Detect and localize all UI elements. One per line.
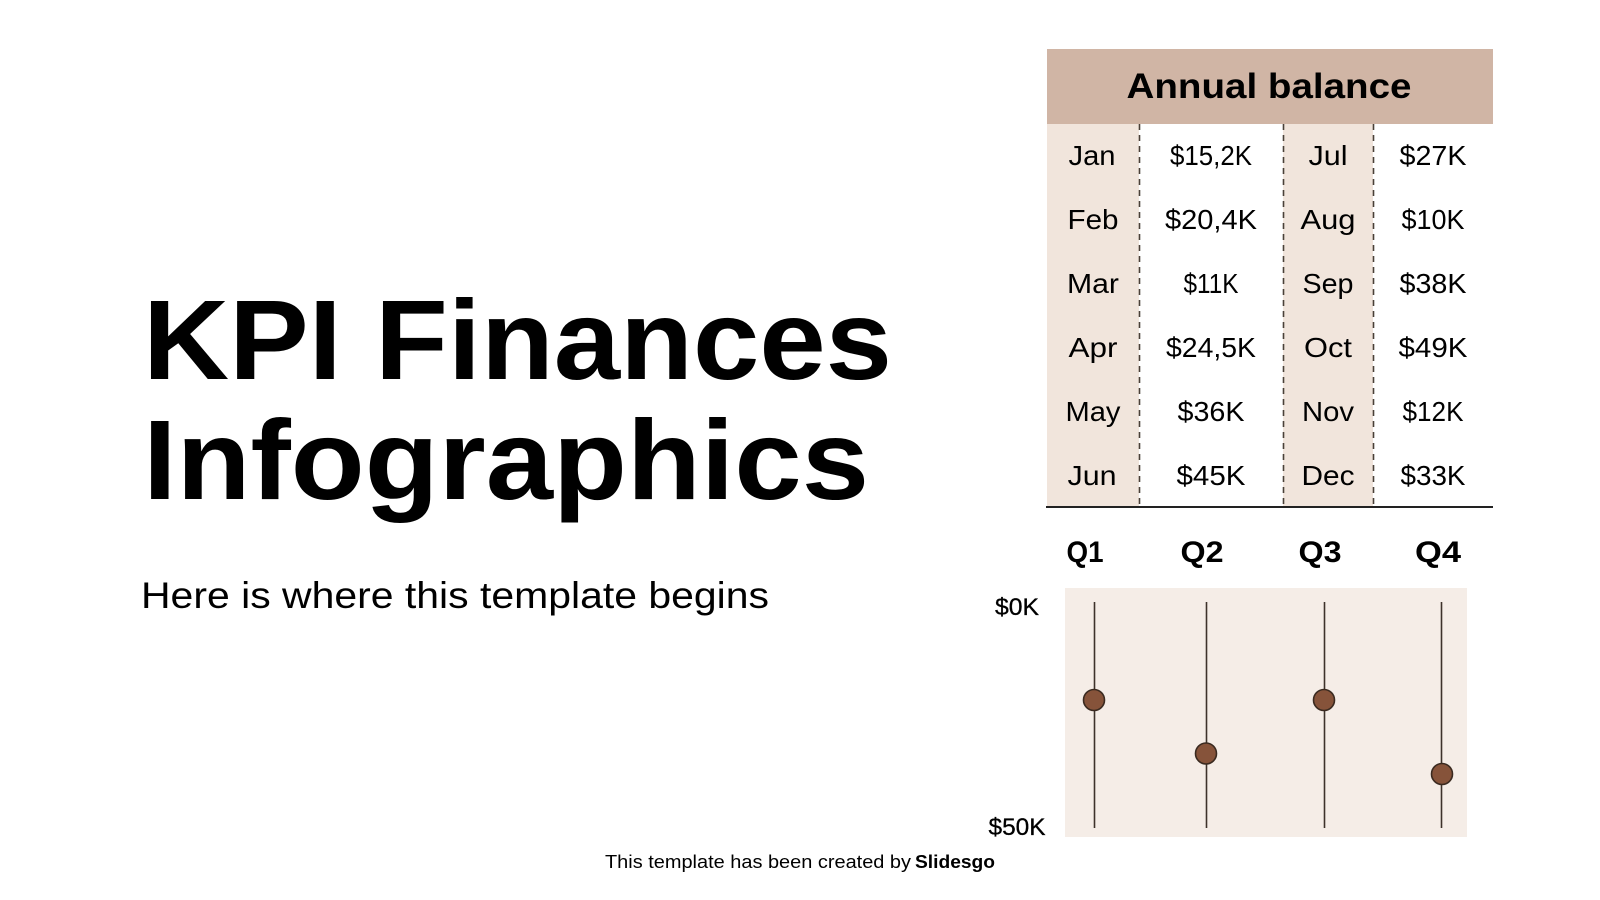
- second half months: Sep: [1302, 268, 1354, 299]
- marker: Q4: [1432, 602, 1452, 828]
- table bottom rule: [1046, 506, 1493, 508]
- second half values: $27K: [1400, 140, 1467, 171]
- first half values: $36K: [1178, 396, 1245, 427]
- first half months: Jan: [1068, 140, 1116, 171]
- table header: [1047, 49, 1493, 124]
- footer credit: This template has been created by: [605, 852, 911, 872]
- first half months: Mar: [1067, 268, 1119, 299]
- quarter labels: Q4: [1415, 536, 1461, 569]
- first half months: Apr: [1068, 332, 1118, 363]
- panel: quarterly chart: [988, 536, 1467, 841]
- second half values: $49K: [1398, 332, 1468, 363]
- title: Infographics: [143, 397, 869, 523]
- second half values: $12K: [1402, 396, 1464, 427]
- quarter labels: Q3: [1298, 536, 1342, 569]
- subtitle: Here is where this template begins: [141, 575, 769, 616]
- panel: annual balance table: [1046, 49, 1493, 507]
- month column shading: [1047, 124, 1373, 507]
- first half months: Feb: [1068, 204, 1118, 235]
- first half months: [1066, 140, 1120, 491]
- footer credit: Slidesgo: [915, 852, 995, 872]
- column dividers: [1140, 124, 1374, 506]
- second half months: [1300, 140, 1356, 491]
- first half values: $20,4K: [1165, 204, 1257, 235]
- first half values: $45K: [1176, 460, 1246, 491]
- quarter labels: Q2: [1180, 536, 1224, 569]
- y axis labels: $50K: [988, 814, 1046, 841]
- second half values: [1398, 140, 1468, 491]
- table header: Annual balance: [1126, 67, 1412, 106]
- quarter labels: [1066, 536, 1461, 569]
- second half values: $10K: [1402, 204, 1465, 235]
- second half months: Jul: [1308, 140, 1348, 171]
- y axis labels: $0K: [995, 594, 1039, 621]
- first half values: $24,5K: [1166, 332, 1256, 363]
- title: KPI Finances: [143, 277, 892, 403]
- first half months: Jun: [1068, 460, 1116, 491]
- chart background: [1065, 588, 1467, 837]
- first half values: [1165, 140, 1257, 491]
- marker: Q2: [1196, 602, 1216, 828]
- quarter labels: Q1: [1066, 536, 1104, 569]
- first half months: May: [1066, 396, 1120, 427]
- second half values: $38K: [1400, 268, 1467, 299]
- second half values: $33K: [1400, 460, 1466, 491]
- second half months: Oct: [1304, 332, 1352, 363]
- first half values: $15,2K: [1170, 140, 1252, 171]
- first half values: $11K: [1184, 268, 1239, 299]
- second half months: Nov: [1302, 396, 1354, 427]
- second half months: Dec: [1302, 460, 1354, 491]
- marker: Q1: [1084, 602, 1104, 828]
- y axis labels: [988, 594, 1046, 841]
- second half months: Aug: [1300, 204, 1356, 235]
- marker: Q3: [1314, 602, 1334, 828]
- title: [143, 277, 892, 523]
